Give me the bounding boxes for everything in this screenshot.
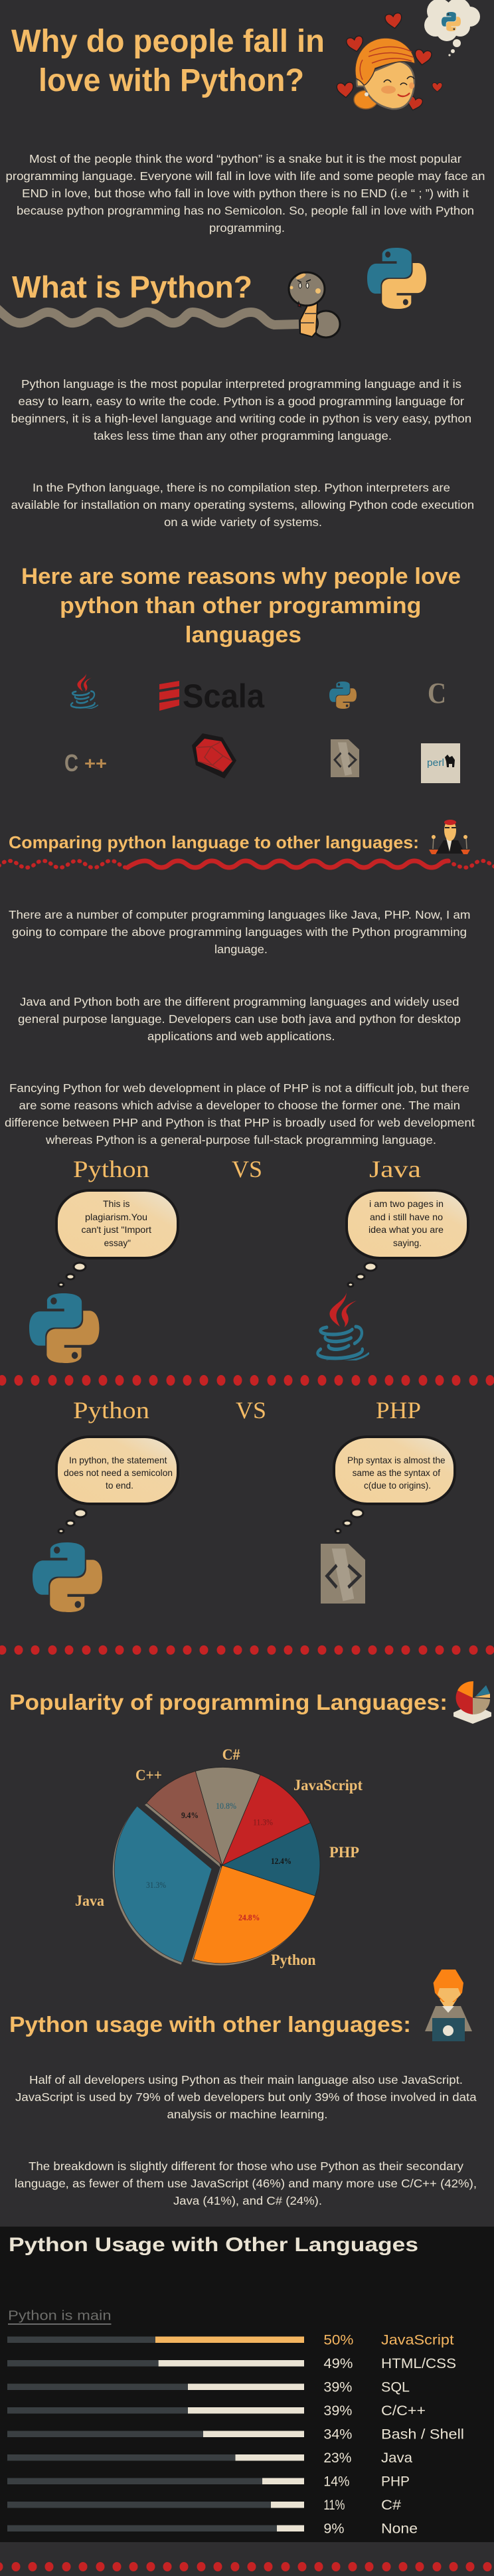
text block: intro: programming. [209, 221, 285, 234]
panel: what is python [0, 248, 474, 529]
slice: Java [114, 1806, 212, 1963]
text block: The breakdown is slightly different for those who use Python as their secondary [29, 2160, 463, 2173]
panel: reasons [21, 564, 461, 783]
row: None [7, 2522, 418, 2536]
row: None: 9% [323, 2522, 344, 2536]
heading: Python usage with other languages: [9, 2012, 411, 2037]
icon: Java [71, 672, 98, 709]
text block: Fancying Python for web development in place of PHP is not a difficult job, but there [9, 1081, 469, 1095]
text block: JavaScript is used by 79% of web developers but only 39% of those involved in data [15, 2090, 477, 2104]
heading: Python: Python [73, 1397, 149, 1424]
panel: intro [5, 0, 485, 234]
text block [15, 2073, 477, 2121]
icon: C++: C [64, 749, 78, 777]
chart title: Python Usage with Other Languages [9, 2234, 418, 2256]
text block: applications and web applications. [147, 1030, 335, 1043]
text block: Java and Python both are the different programming languages and widely used [20, 995, 459, 1008]
speech bubble: Python [56, 1190, 178, 1287]
heading: VS: VS [236, 1397, 266, 1424]
icon: Java [317, 1290, 369, 1362]
icon: Scala: Scala [183, 678, 265, 715]
title [11, 24, 325, 98]
series labels [75, 1746, 363, 1968]
icon: C: C [428, 677, 446, 709]
series labels: C++ [135, 1767, 162, 1784]
heading: python than other programming [60, 593, 421, 618]
heading: Popularity of programming Languages: [9, 1690, 448, 1714]
percent labels: 31.3% [146, 1881, 166, 1890]
percent labels [146, 1801, 291, 1922]
row: C#: 11% [323, 2498, 345, 2513]
shadow edges [113, 1773, 313, 1966]
speech bubble: Java: idea what you are [369, 1224, 444, 1235]
row: SQL: 39% [323, 2379, 352, 2395]
icon: file code [331, 739, 359, 777]
panel: Python vs PHP [33, 1397, 455, 1612]
text block: on a wide variety of systems. [164, 515, 322, 529]
text block: available for installation on many operating systems, allowing Python code execution [11, 498, 474, 511]
text block [11, 377, 471, 442]
wavy divider [0, 861, 494, 868]
panel: comparing [0, 820, 494, 1147]
text block [9, 908, 470, 956]
speech bubble: Java: i am two pages in [369, 1198, 444, 1209]
heading: Comparing python language to other languages: [9, 832, 419, 852]
series labels: Java [75, 1892, 104, 1909]
series labels: C# [222, 1746, 240, 1763]
speech bubble: Python: plagiarism.You [85, 1212, 147, 1222]
text block [11, 481, 474, 529]
row: HTML/CSS [7, 2356, 456, 2371]
row: JavaScript [7, 2333, 454, 2347]
series labels: Python [271, 1952, 316, 1968]
heading: VS: VS [232, 1156, 262, 1182]
speech bubble: PHP: Php syntax is almost the [347, 1455, 446, 1465]
slice: PHP [222, 1823, 320, 1896]
text block: intro: Most of the people think the word “python” is a snake but it is the most popular [29, 152, 461, 165]
speech bubble: Java: and i still have no [370, 1212, 443, 1222]
text block [15, 2160, 477, 2207]
panel: Python vs Java [29, 1156, 468, 1363]
series labels: PHP [329, 1844, 359, 1861]
row: Java [7, 2450, 412, 2466]
title: Why do people fall in [11, 24, 325, 59]
speech bubble: Python: can't just "Import [81, 1224, 151, 1235]
text block: language. [214, 943, 268, 956]
row: Java: 23% [323, 2450, 351, 2466]
panel: popularity [9, 1681, 491, 1968]
text block: intro: END in love, but those who fall in love with python there is no END (i.e “ ; ”) with it [22, 187, 469, 200]
speech bubble: PHP: c(due to origins). [364, 1480, 431, 1491]
icon: Python [33, 1542, 102, 1612]
slice: C# [195, 1768, 260, 1865]
row: JavaScript: JavaScript [381, 2333, 454, 2347]
text block: difference between PHP and Python is that PHP is broadly used for web development [5, 1116, 475, 1129]
text block: general purpose language. Developers can use both java and python for desktop [18, 1012, 461, 1026]
icon: snake [0, 272, 340, 337]
heading [21, 564, 461, 648]
percent labels: 24.8% [238, 1913, 260, 1922]
speech bubble: Python: to end. [106, 1480, 133, 1491]
text block: Half of all developers using Python as their main language also use JavaScript. [29, 2073, 463, 2086]
speech bubble: Python: does not need a semicolon [64, 1467, 173, 1478]
icon: Ruby [192, 733, 236, 779]
row: C/C++ [7, 2403, 426, 2419]
speech bubble: Python: essay" [104, 1238, 131, 1248]
pie chart [75, 1746, 363, 1968]
text block: going to compare the above programming languages with the Python programming [12, 925, 467, 939]
speech bubble: Python: In python, the statement [69, 1455, 167, 1465]
row: SQL: SQL [381, 2379, 410, 2395]
text block: easy to learn, easy to write the code. Python is a good programming language for [19, 395, 464, 408]
row: C#: C# [381, 2498, 401, 2513]
row: C/C++: 39% [323, 2403, 352, 2419]
text block: beginners, it is a high-level language and writing code in python is very easy, python [11, 412, 471, 425]
speech bubble: Python [56, 1437, 178, 1533]
row: Bash / Shell: 34% [323, 2427, 352, 2442]
text block: intro: because python programming has no Semicolon. So, people fall in love with Python [17, 204, 474, 217]
speech bubble: PHP: same as the syntax of [353, 1467, 440, 1478]
row: HTML/CSS: 49% [323, 2356, 353, 2371]
text block: analysis or machine learning. [167, 2108, 328, 2121]
slice: C++ [147, 1771, 222, 1865]
row: PHP: PHP [381, 2474, 410, 2490]
heading: What is Python? [12, 270, 252, 304]
bar rows [7, 2333, 464, 2536]
row: Java: Java [381, 2450, 412, 2466]
text block: Python language is the most popular interpreted programming language and it is [21, 377, 461, 391]
percent labels: 11.3% [253, 1817, 273, 1827]
icon: judge with scales [429, 820, 470, 854]
heading: Here are some reasons why people love [21, 564, 461, 589]
percent labels: 9.4% [181, 1811, 199, 1820]
row: None: None [381, 2522, 418, 2536]
text block [5, 1081, 475, 1147]
percent labels: 10.8% [216, 1801, 236, 1811]
text block: are some reasons which advise a developer to choose the former one. The main [19, 1099, 460, 1112]
icon: file code [321, 1544, 365, 1604]
row: JavaScript: 50% [323, 2333, 353, 2347]
slice: Python [193, 1865, 315, 1964]
text block: whereas Python is a general-purpose full-stack programming language. [45, 1133, 436, 1147]
panel: usage [9, 1970, 477, 2207]
icon: small pie chart [453, 1681, 491, 1724]
title: love with Python? [39, 63, 304, 98]
text block: intro: programming language. Everyone will fall in love with life and some people may face an [5, 169, 485, 183]
icon: Python [29, 1293, 100, 1363]
row: PHP: 14% [323, 2474, 349, 2490]
text block: language, as fewer of them use JavaScript (46%) and many more use C/C++ (42%), [15, 2177, 477, 2190]
heading: PHP: PHP [376, 1397, 421, 1424]
icon: girl in love thinking of Python [337, 0, 480, 112]
row: SQL [7, 2379, 410, 2395]
text block [18, 995, 461, 1043]
text block: There are a number of computer programming languages like Java, PHP. Now, I am [9, 908, 470, 921]
row: Bash / Shell: Bash / Shell [381, 2427, 464, 2442]
series labels: JavaScript [293, 1777, 363, 1794]
row: C# [7, 2498, 401, 2513]
speech bubble: Java [347, 1190, 468, 1287]
text block: In the Python language, there is no compilation step. Python interpreters are [33, 481, 450, 494]
row: PHP [7, 2474, 410, 2490]
heading: Python: Python [73, 1156, 149, 1182]
dotted divider [0, 1645, 494, 1655]
icon: Perl [421, 743, 460, 783]
text block: takes less time than any other programming language. [94, 429, 392, 442]
heading: Java: Java [369, 1156, 421, 1182]
row: C/C++: C/C++ [381, 2403, 426, 2419]
icon: Perl: perl [427, 757, 444, 769]
dotted divider [0, 1375, 494, 1386]
percent labels: 12.4% [271, 1857, 291, 1866]
icon: Python [329, 682, 357, 709]
speech bubble: Python: This is [103, 1198, 130, 1209]
icon: person with laptop [425, 1970, 472, 2041]
panel: bar chart [0, 2227, 494, 2542]
heading: languages [185, 622, 301, 648]
icon: C++: ++ [84, 753, 107, 773]
row: Bash / Shell [7, 2427, 464, 2442]
text block: Java (41%), and C# (24%). [173, 2194, 322, 2207]
row: HTML/CSS: HTML/CSS [381, 2356, 456, 2371]
dotted divider [0, 2562, 491, 2571]
icon: python logo large [367, 248, 426, 309]
icon: C++ [64, 749, 107, 777]
speech bubble: Java: saying. [393, 1238, 422, 1248]
speech bubble: PHP [334, 1437, 455, 1533]
chart subtitle: Python is main [8, 2309, 111, 2324]
text block: intro [5, 152, 485, 234]
slice: JavaScript [222, 1775, 311, 1865]
